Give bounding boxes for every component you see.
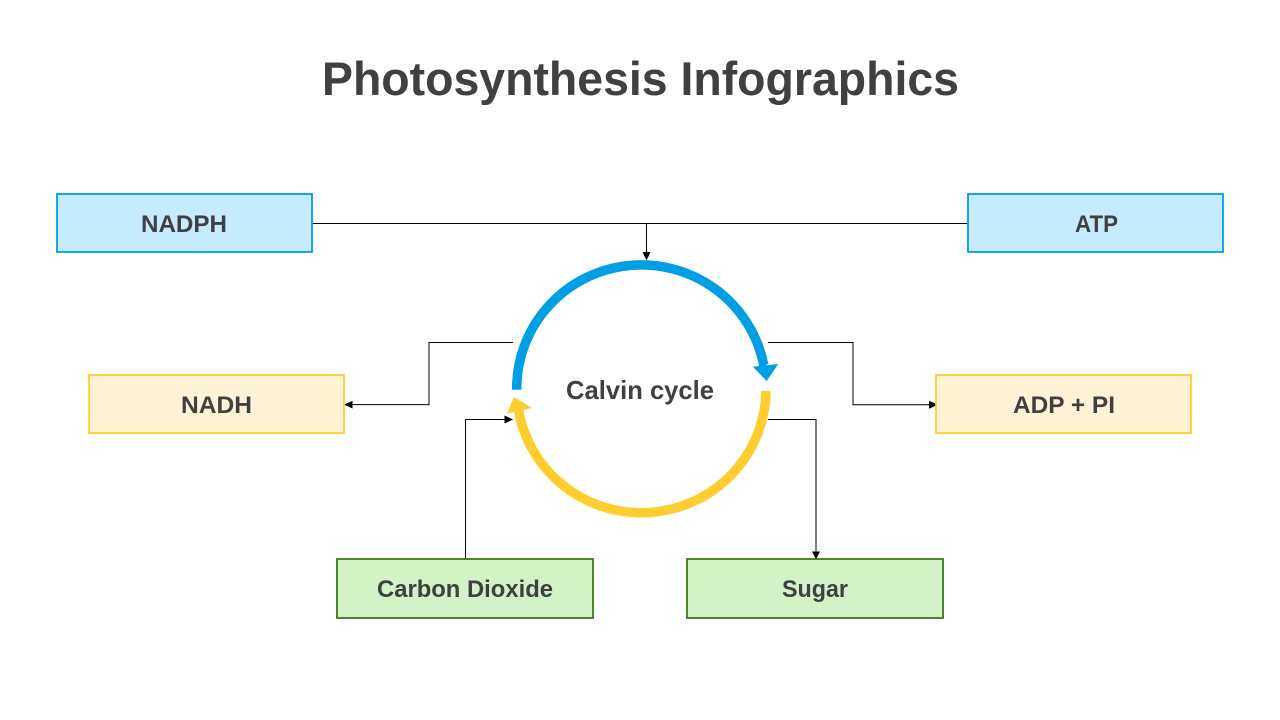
connector: NADPH and ATP into Calvin cycle <box>312 224 968 260</box>
cycle: blue arc arrow <box>517 265 778 390</box>
box: NADH <box>89 375 344 433</box>
box: Sugar: Sugar <box>782 576 848 603</box>
connector: Calvin cycle to ADP + PI <box>768 342 938 409</box>
box: Carbon Dioxide <box>337 559 593 618</box>
box: ATP: ATP <box>1075 211 1118 238</box>
connector: Carbon Dioxide to Calvin cycle <box>466 416 513 559</box>
box: Sugar <box>687 559 943 618</box>
box: ATP <box>968 194 1223 252</box>
box: ADP + PI: ADP + PI <box>1013 392 1115 419</box>
cycle: yellow arc arrow <box>507 391 766 513</box>
title: Photosynthesis Infographics <box>322 52 959 105</box>
box: ADP + PI <box>936 375 1191 433</box>
box: NADPH: NADPH <box>141 211 227 238</box>
box: Carbon Dioxide: Carbon Dioxide <box>377 576 553 603</box>
box: NADPH <box>57 194 312 252</box>
connector: Calvin cycle to NADH <box>344 342 513 408</box>
connector: Calvin cycle to Sugar <box>768 420 820 560</box>
center label: Calvin cycle: Calvin cycle <box>566 375 714 405</box>
box: NADH: NADH <box>181 392 252 419</box>
